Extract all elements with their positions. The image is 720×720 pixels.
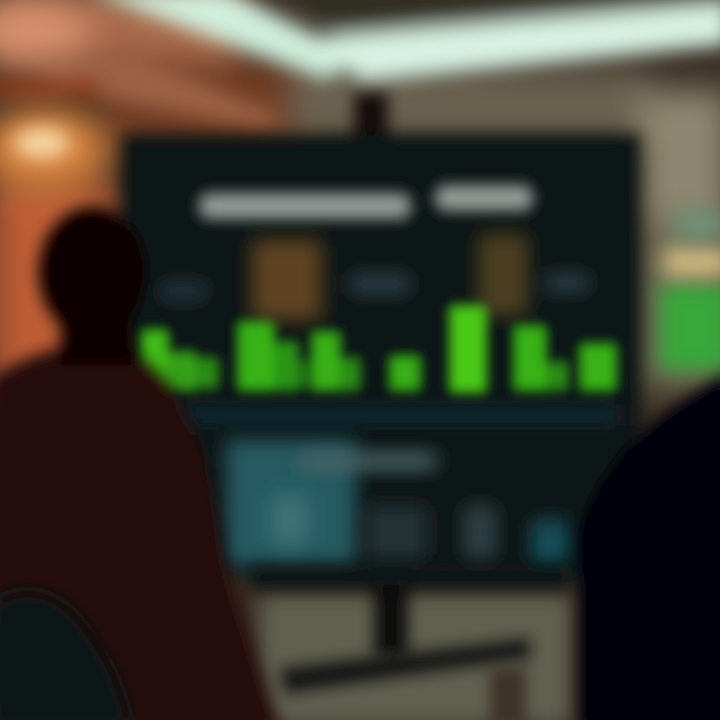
green bar chart	[142, 306, 616, 392]
ceiling light strips	[0, 0, 720, 130]
chair back in the foreground	[0, 591, 132, 720]
panel: room background	[0, 0, 720, 390]
screen lower table panels	[150, 405, 620, 565]
ceiling lamp glow	[0, 4, 111, 194]
screen heading bar	[200, 186, 532, 218]
screen brown columns	[252, 234, 528, 320]
screen mount pole	[354, 92, 388, 152]
table and stand below the screen	[250, 566, 570, 720]
silhouette: person on the left	[0, 206, 282, 720]
silhouette: person on the right	[578, 372, 720, 720]
panel: dark screen	[122, 134, 640, 574]
screen small labels	[160, 274, 589, 300]
right window with green	[660, 210, 720, 370]
